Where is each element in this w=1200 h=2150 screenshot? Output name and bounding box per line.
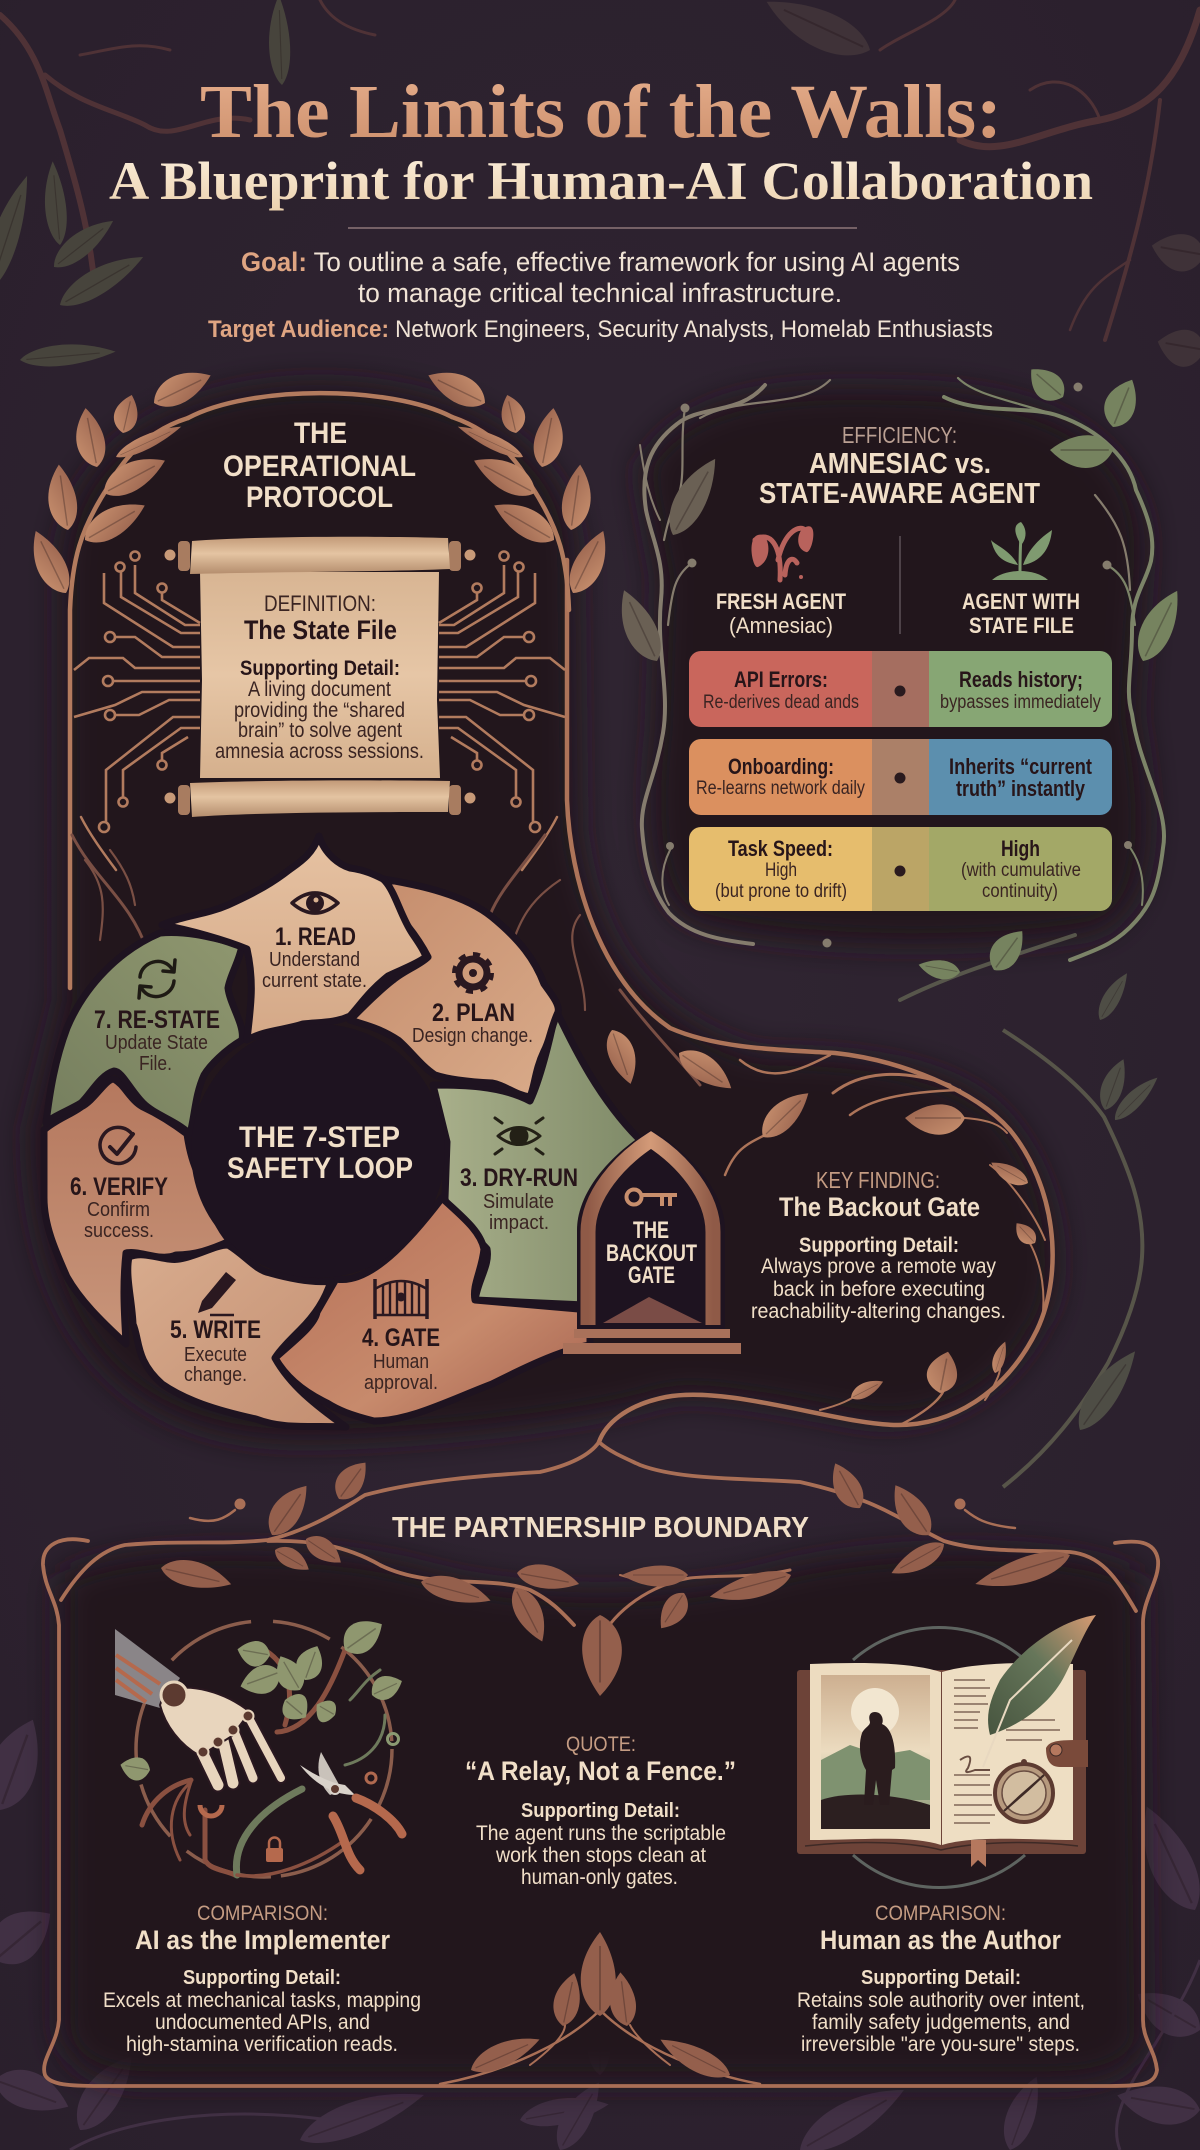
clasp [1046,1740,1088,1767]
gate label: THE [633,1217,669,1244]
text block: human as the author: irreversible "are you-sure" steps. [801,2033,1080,2056]
comparison row: task speed: continuity) [982,881,1058,902]
gate label: BACKOUT [606,1240,697,1267]
illustration: open book with quill and compass [797,1615,1096,1888]
step 3 text [460,1164,578,1234]
target audience: Target Audience: Network Engineers, Security Analysts, Homelab Enthusiasts [208,316,993,343]
step 6 verify segment [44,1079,230,1344]
vine buds [666,382,1132,948]
text block: quote: Supporting Detail: [521,1800,680,1822]
text block: AI as the implementer: Supporting Detail: [183,1967,341,1989]
comparison row: API errors: bypasses immediately [940,692,1101,713]
center label: THE 7-STEP [239,1121,400,1154]
scroll [164,537,476,817]
circuit traces left [74,552,200,832]
text block: quote: work then stops clean at [495,1844,706,1867]
laurel leaves right [423,362,617,600]
heading: THE [294,417,347,450]
step 3 text: impact. [489,1212,549,1234]
key finding leaves [601,1025,1040,1404]
center hub [191,1024,445,1278]
step 6 text: 6. VERIFY [70,1173,168,1201]
padlock [266,1838,283,1862]
pruning shears [300,1752,402,1870]
scroll text: DEFINITION: [264,591,376,616]
icon: verify check [100,1127,136,1163]
text block: key finding: Supporting Detail: [799,1234,959,1257]
comparison row: onboarding: truth” instantly [956,776,1086,801]
comparison row: task speed: (with cumulative [961,860,1081,881]
icon: refresh arrows [139,960,175,998]
step 3 text: 3. DRY-RUN [460,1164,578,1192]
comparison row: onboarding: Re-learns network daily [696,778,865,799]
column headers: AGENT WITH [962,589,1080,614]
step 5 text: Execute [184,1344,247,1366]
heading: AMNESIAC vs. [809,448,991,480]
title [109,70,1093,211]
step 5 text: change. [184,1364,247,1386]
step 7 re-state segment [46,932,242,1134]
step 2 plan segment [350,879,558,1097]
book writing lines [954,1680,1060,1823]
step 2 text [412,999,533,1047]
robot palm [160,1688,250,1756]
book picture [821,1675,930,1829]
text block: AI as the implementer: AI as the Implementer [135,1925,390,1955]
column divider [899,536,901,634]
robot arm [115,1629,180,1708]
step 7 text [94,1006,220,1075]
column headers [716,589,1080,638]
text block: quote: QUOTE: [566,1733,636,1756]
arch frame [70,393,700,1085]
icon: dry-run eye [495,1118,543,1154]
step 4 gate segment [275,1198,590,1421]
column headers: (Amnesiac) [729,613,833,638]
text block: quote [465,1733,736,1889]
panel: efficiency comparison [609,360,1189,1487]
illustration: robot hand with plants [115,1611,406,1877]
icon: eye [292,893,338,913]
heading [759,422,1040,510]
comparison row: task speed: High [765,860,797,881]
center label [227,1121,413,1185]
icon: gate [375,1279,427,1319]
panel: 7-step safety loop [44,836,640,1427]
panel: partnership boundary [43,1442,1158,2086]
step 6 text [70,1173,168,1242]
icon: key [626,1190,677,1206]
scroll text: A living document [248,678,391,701]
vine frame [640,378,1164,1000]
text block: human as the author: family safety judgements, and [812,2011,1070,2034]
step 1 text: 1. READ [275,923,356,951]
heading [223,417,416,514]
title line 1: The Limits of the Walls: [200,70,1002,154]
panel: operational protocol [22,362,700,1085]
step 6 text: Confirm [87,1199,150,1221]
goal and audience text [208,247,993,343]
step 7 text: 7. RE-STATE [94,1006,220,1034]
text block: AI as the implementer: undocumented APIs, and [155,2011,370,2034]
step 4 text [362,1324,440,1394]
title line 2: A Blueprint for Human-AI Collaboration [109,151,1093,211]
step 4 text: 4. GATE [362,1324,440,1352]
step 5 text [170,1316,261,1386]
text block: key finding [751,1167,1006,1323]
text block: human as the author: Retains sole authority over intent, [797,1989,1085,2012]
scroll text: amnesia across sessions. [215,740,424,763]
step 3 text: Simulate [483,1191,554,1213]
circuit traces right [439,552,565,832]
step icons and labels [70,893,578,1394]
step 1 text [262,923,367,992]
icon: wilted plant [751,526,813,580]
text block: key finding: KEY FINDING: [816,1167,940,1193]
scroll text: The State File [244,615,397,645]
text block: human as the author: Supporting Detail: [861,1967,1021,1989]
goal line 2: to manage critical technical infrastructure. [358,278,842,308]
robot fingers [203,1718,281,1785]
scroll text: brain” to solve agent [238,719,402,742]
text block: AI as the implementer: high-stamina verification reads. [126,2033,398,2056]
gate label: GATE [628,1262,675,1289]
scroll text: providing the “shared [234,699,405,722]
heading: THE PARTNERSHIP BOUNDARY [392,1512,809,1544]
icon: pencil [198,1272,236,1315]
title divider [348,227,857,229]
text block: AI as the implementer [103,1902,421,2056]
heading: OPERATIONAL [223,450,416,483]
laurel leaves left [22,362,216,600]
text block: human as the author: COMPARISON: [875,1902,1006,1925]
step 3 dry-run segment [433,1010,640,1305]
scroll text [215,591,424,763]
comparison row: onboarding: Onboarding: [728,754,834,779]
main green stem [1003,1030,1142,1487]
step 5 text: 5. WRITE [170,1316,261,1344]
dark panel backdrops [30,385,1146,2082]
comparison row: task speed: Task Speed: [728,836,833,861]
heading: EFFICIENCY: [842,422,957,448]
arch gate: the backout gate [563,1130,741,1354]
text block: AI as the implementer: COMPARISON: [197,1902,328,1925]
icon: sprout [991,522,1052,580]
step 7 text: File. [139,1053,172,1075]
step 2 text: 2. PLAN [432,999,515,1027]
text block: key finding: The Backout Gate [779,1192,980,1222]
frame with vines [43,1442,1158,2086]
text block: quote: “A Relay, Not a Fence.” [465,1756,736,1786]
step 1 text: current state. [262,970,367,992]
comparison row: API errors: Reads history; [959,667,1083,692]
heading: STATE-AWARE AGENT [759,478,1040,510]
text block: key finding: Always prove a remote way [761,1255,996,1278]
text block: human as the author: Human as the Author [820,1925,1061,1955]
vine leaves [917,360,1189,982]
bookmark [971,1840,986,1867]
step 2 text: Design change. [412,1025,533,1047]
connecting vine: operational panel to partnership [567,560,1053,1442]
gate label [606,1217,697,1289]
text block: quote: human-only gates. [521,1866,678,1889]
comparison row: API errors: Re-derives dead ands [703,692,859,713]
column headers: STATE FILE [969,613,1074,638]
compass [995,1759,1053,1822]
step 5 write segment [128,1245,346,1427]
column headers: FRESH AGENT [716,589,846,614]
comparison row: API errors [689,651,1112,727]
step 6 text: success. [84,1220,154,1242]
comparison row: task speed [689,827,1112,911]
text block: AI as the implementer: Excels at mechanical tasks, mapping [103,1989,421,2012]
comparison row: task speed: (but prone to drift) [715,881,847,902]
comparison row: onboarding: Inherits “current [949,754,1093,779]
text block: key finding: reachability-altering changes. [751,1300,1006,1323]
comparison row: task speed: High [1001,836,1040,861]
goal: Goal: To outline a safe, effective framework for using AI agents [241,247,960,277]
frame leaves [158,1454,1074,2086]
heading: PROTOCOL [246,481,393,514]
center label: SAFETY LOOP [227,1152,413,1185]
comparison row: onboarding [689,739,1112,815]
step 4 text: Human [373,1351,429,1373]
step 1 read segment [162,836,426,1040]
step 7 text: Update State [105,1032,208,1054]
step 4 text: approval. [364,1372,438,1394]
text block: key finding: back in before executing [773,1278,985,1301]
step 1 text: Understand [269,949,360,971]
feather quill [983,1615,1096,1767]
scroll text: Supporting Detail: [240,657,400,680]
text block: human as the author [797,1902,1085,2056]
comparison row: API errors: API Errors: [734,667,828,692]
icon: gear [454,954,492,992]
text block: quote: The agent runs the scriptable [476,1822,726,1845]
